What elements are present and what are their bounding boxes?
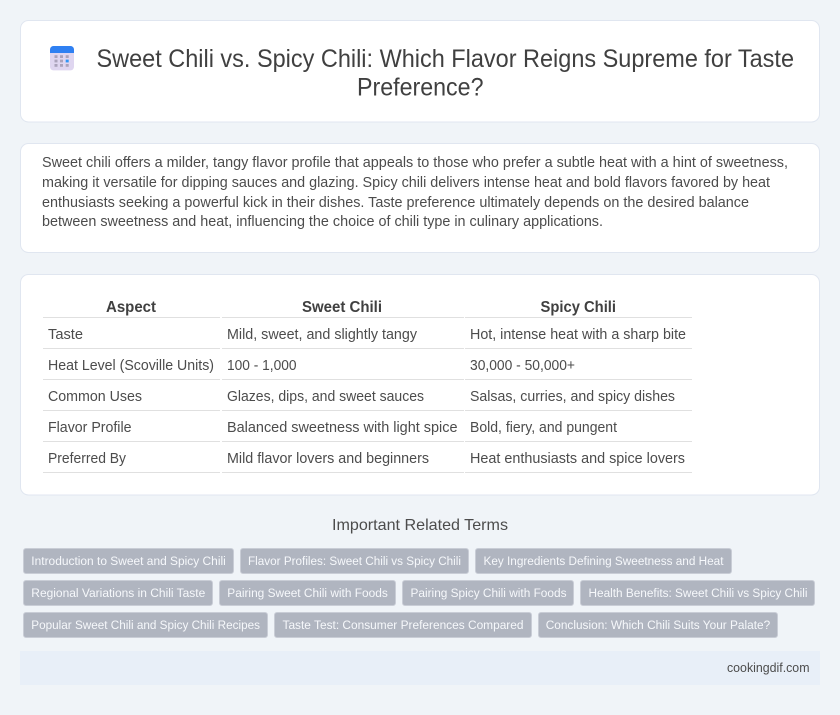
tag: Flavor Profiles: Sweet Chili vs Spicy Chili bbox=[248, 554, 461, 568]
tag bbox=[24, 548, 234, 574]
panel: title card bbox=[20, 20, 820, 122]
table row: common uses bbox=[43, 389, 692, 411]
table row: preferred by: Preferred By bbox=[48, 451, 127, 467]
panel: comparison table bbox=[20, 274, 820, 495]
table row: preferred by bbox=[43, 451, 692, 473]
panel: description bbox=[20, 144, 820, 252]
tag bbox=[402, 580, 574, 606]
icon: calendar bbox=[50, 46, 74, 70]
table row: heat level: 30,000 - 50,000+ bbox=[470, 358, 575, 374]
table row: taste: Taste bbox=[48, 327, 83, 343]
tag bbox=[240, 548, 468, 574]
table header: Sweet Chili bbox=[302, 299, 382, 316]
text block: description: between sweetness and heat, influencing the choice of chili type in culinary applications. bbox=[42, 214, 603, 230]
table row: preferred by: Mild flavor lovers and beginners bbox=[227, 451, 429, 467]
tag bbox=[24, 580, 212, 606]
table row: flavor profile: Balanced sweetness with light spice bbox=[227, 420, 458, 436]
table row: taste: Mild, sweet, and slightly tangy bbox=[227, 327, 418, 343]
tag: Health Benefits: Sweet Chili vs Spicy Chili bbox=[588, 586, 808, 600]
table header bbox=[43, 299, 692, 318]
table row: common uses: Salsas, curries, and spicy dishes bbox=[470, 389, 675, 405]
table row: heat level: 100 - 1,000 bbox=[227, 358, 296, 374]
table row: flavor profile bbox=[43, 420, 692, 442]
tag: Pairing Sweet Chili with Foods bbox=[227, 586, 388, 600]
text block: description: enthusiasts seeking a powerful kick in their dishes. Taste preference ultimately depends on the desired balance bbox=[42, 195, 749, 211]
title bbox=[96, 45, 794, 102]
tag bbox=[580, 580, 814, 606]
table row: flavor profile: Flavor Profile bbox=[48, 420, 132, 436]
tag: Conclusion: Which Chili Suits Your Palate? bbox=[546, 618, 770, 632]
table row: common uses: Common Uses bbox=[48, 389, 142, 405]
text block: description: Sweet chili offers a milder, tangy flavor profile that appeals to those who prefer a subtle heat with a hint of sweetness, bbox=[42, 155, 788, 171]
footer: cookingdif.com bbox=[727, 660, 810, 675]
table row: taste: Hot, intense heat with a sharp bite bbox=[470, 327, 686, 343]
tag: Popular Sweet Chili and Spicy Chili Recipes bbox=[31, 618, 260, 632]
table header: Aspect bbox=[106, 299, 157, 316]
text block: description bbox=[42, 155, 788, 230]
title: Preference? bbox=[357, 74, 484, 102]
tag bbox=[476, 548, 732, 574]
tag: Key Ingredients Defining Sweetness and Heat bbox=[484, 554, 724, 568]
table row: heat level bbox=[43, 358, 692, 380]
table row: common uses: Glazes, dips, and sweet sauces bbox=[227, 389, 424, 405]
tag: Introduction to Sweet and Spicy Chili bbox=[31, 554, 226, 568]
table row: taste bbox=[43, 327, 692, 349]
tag: Pairing Spicy Chili with Foods bbox=[410, 586, 566, 600]
tag bbox=[274, 612, 532, 638]
table row: preferred by: Heat enthusiasts and spice lovers bbox=[470, 451, 685, 467]
heading: related terms: Important Related Terms bbox=[332, 517, 508, 534]
tag bbox=[538, 612, 778, 638]
tag bbox=[220, 580, 396, 606]
related term tags bbox=[24, 548, 814, 638]
table row: heat level: Heat Level (Scoville Units) bbox=[48, 358, 214, 374]
tag: Taste Test: Consumer Preferences Compared bbox=[282, 618, 524, 632]
title: Sweet Chili vs. Spicy Chili: Which Flavor Reigns Supreme for Taste bbox=[96, 45, 794, 73]
text block: description: making it versatile for dipping sauces and glazing. Spicy chili delivers intense heat and bold flavors favored by heat bbox=[42, 175, 770, 191]
table row: flavor profile: Bold, fiery, and pungent bbox=[470, 420, 617, 436]
tag: Regional Variations in Chili Taste bbox=[31, 586, 205, 600]
tag bbox=[24, 612, 268, 638]
footer bbox=[20, 651, 820, 685]
table header: Spicy Chili bbox=[540, 299, 616, 316]
